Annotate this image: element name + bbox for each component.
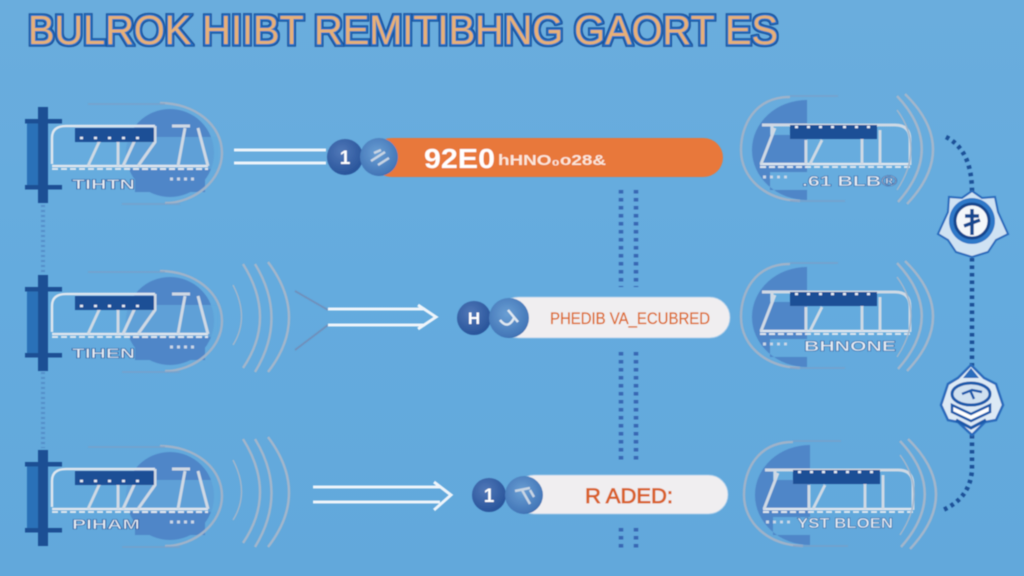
pill: row 3 (472, 475, 728, 514)
panel: right device 3 (744, 439, 936, 549)
pill: row 1: hHNO₀o28& (498, 152, 606, 169)
icon: shield badge (941, 365, 1003, 435)
panel: left device 1 (25, 103, 222, 204)
pill: row 3: 1 (484, 486, 495, 507)
pill: row 2: H (468, 309, 480, 328)
device 3 label: YST BLOEN (797, 515, 893, 532)
panel: right device 2 (741, 261, 933, 371)
panel: right device 1 (741, 94, 933, 204)
number badge (457, 301, 491, 335)
device 3 label: PIHAM (72, 516, 140, 532)
device 1 label: .61 BLB® (802, 173, 897, 190)
center dotted connectors (621, 190, 636, 552)
number badge (472, 478, 506, 512)
device 1 label: TIHTN (72, 176, 135, 192)
icon: round badge (938, 191, 1008, 257)
right dotted connector (943, 137, 972, 510)
panel: left device 3 (25, 437, 289, 547)
icon badge (489, 298, 529, 338)
pill text: 92E0 (424, 143, 495, 174)
number badge (327, 139, 363, 175)
pill: row 1 (327, 138, 723, 177)
pill text: R ADED: (585, 485, 673, 508)
title: BULROK HIIBT REMITIBHNG GAORT ES (28, 7, 778, 53)
pill: row 1: 1 (340, 148, 351, 169)
arrow: row 3 (313, 482, 451, 510)
left connector dots (41, 205, 45, 448)
arrow: row 1 (234, 150, 326, 163)
pill: row 2 (457, 297, 730, 338)
pill text: PHEDIB VA_ECUBRED (550, 309, 710, 328)
panel: left device 2 (25, 262, 289, 372)
arrow: row 2 (295, 291, 436, 350)
device 2 label: TIHEN (72, 345, 135, 361)
icon badge (505, 476, 543, 514)
device 2 label: BHNONE (804, 338, 896, 355)
icon badge (360, 138, 398, 176)
